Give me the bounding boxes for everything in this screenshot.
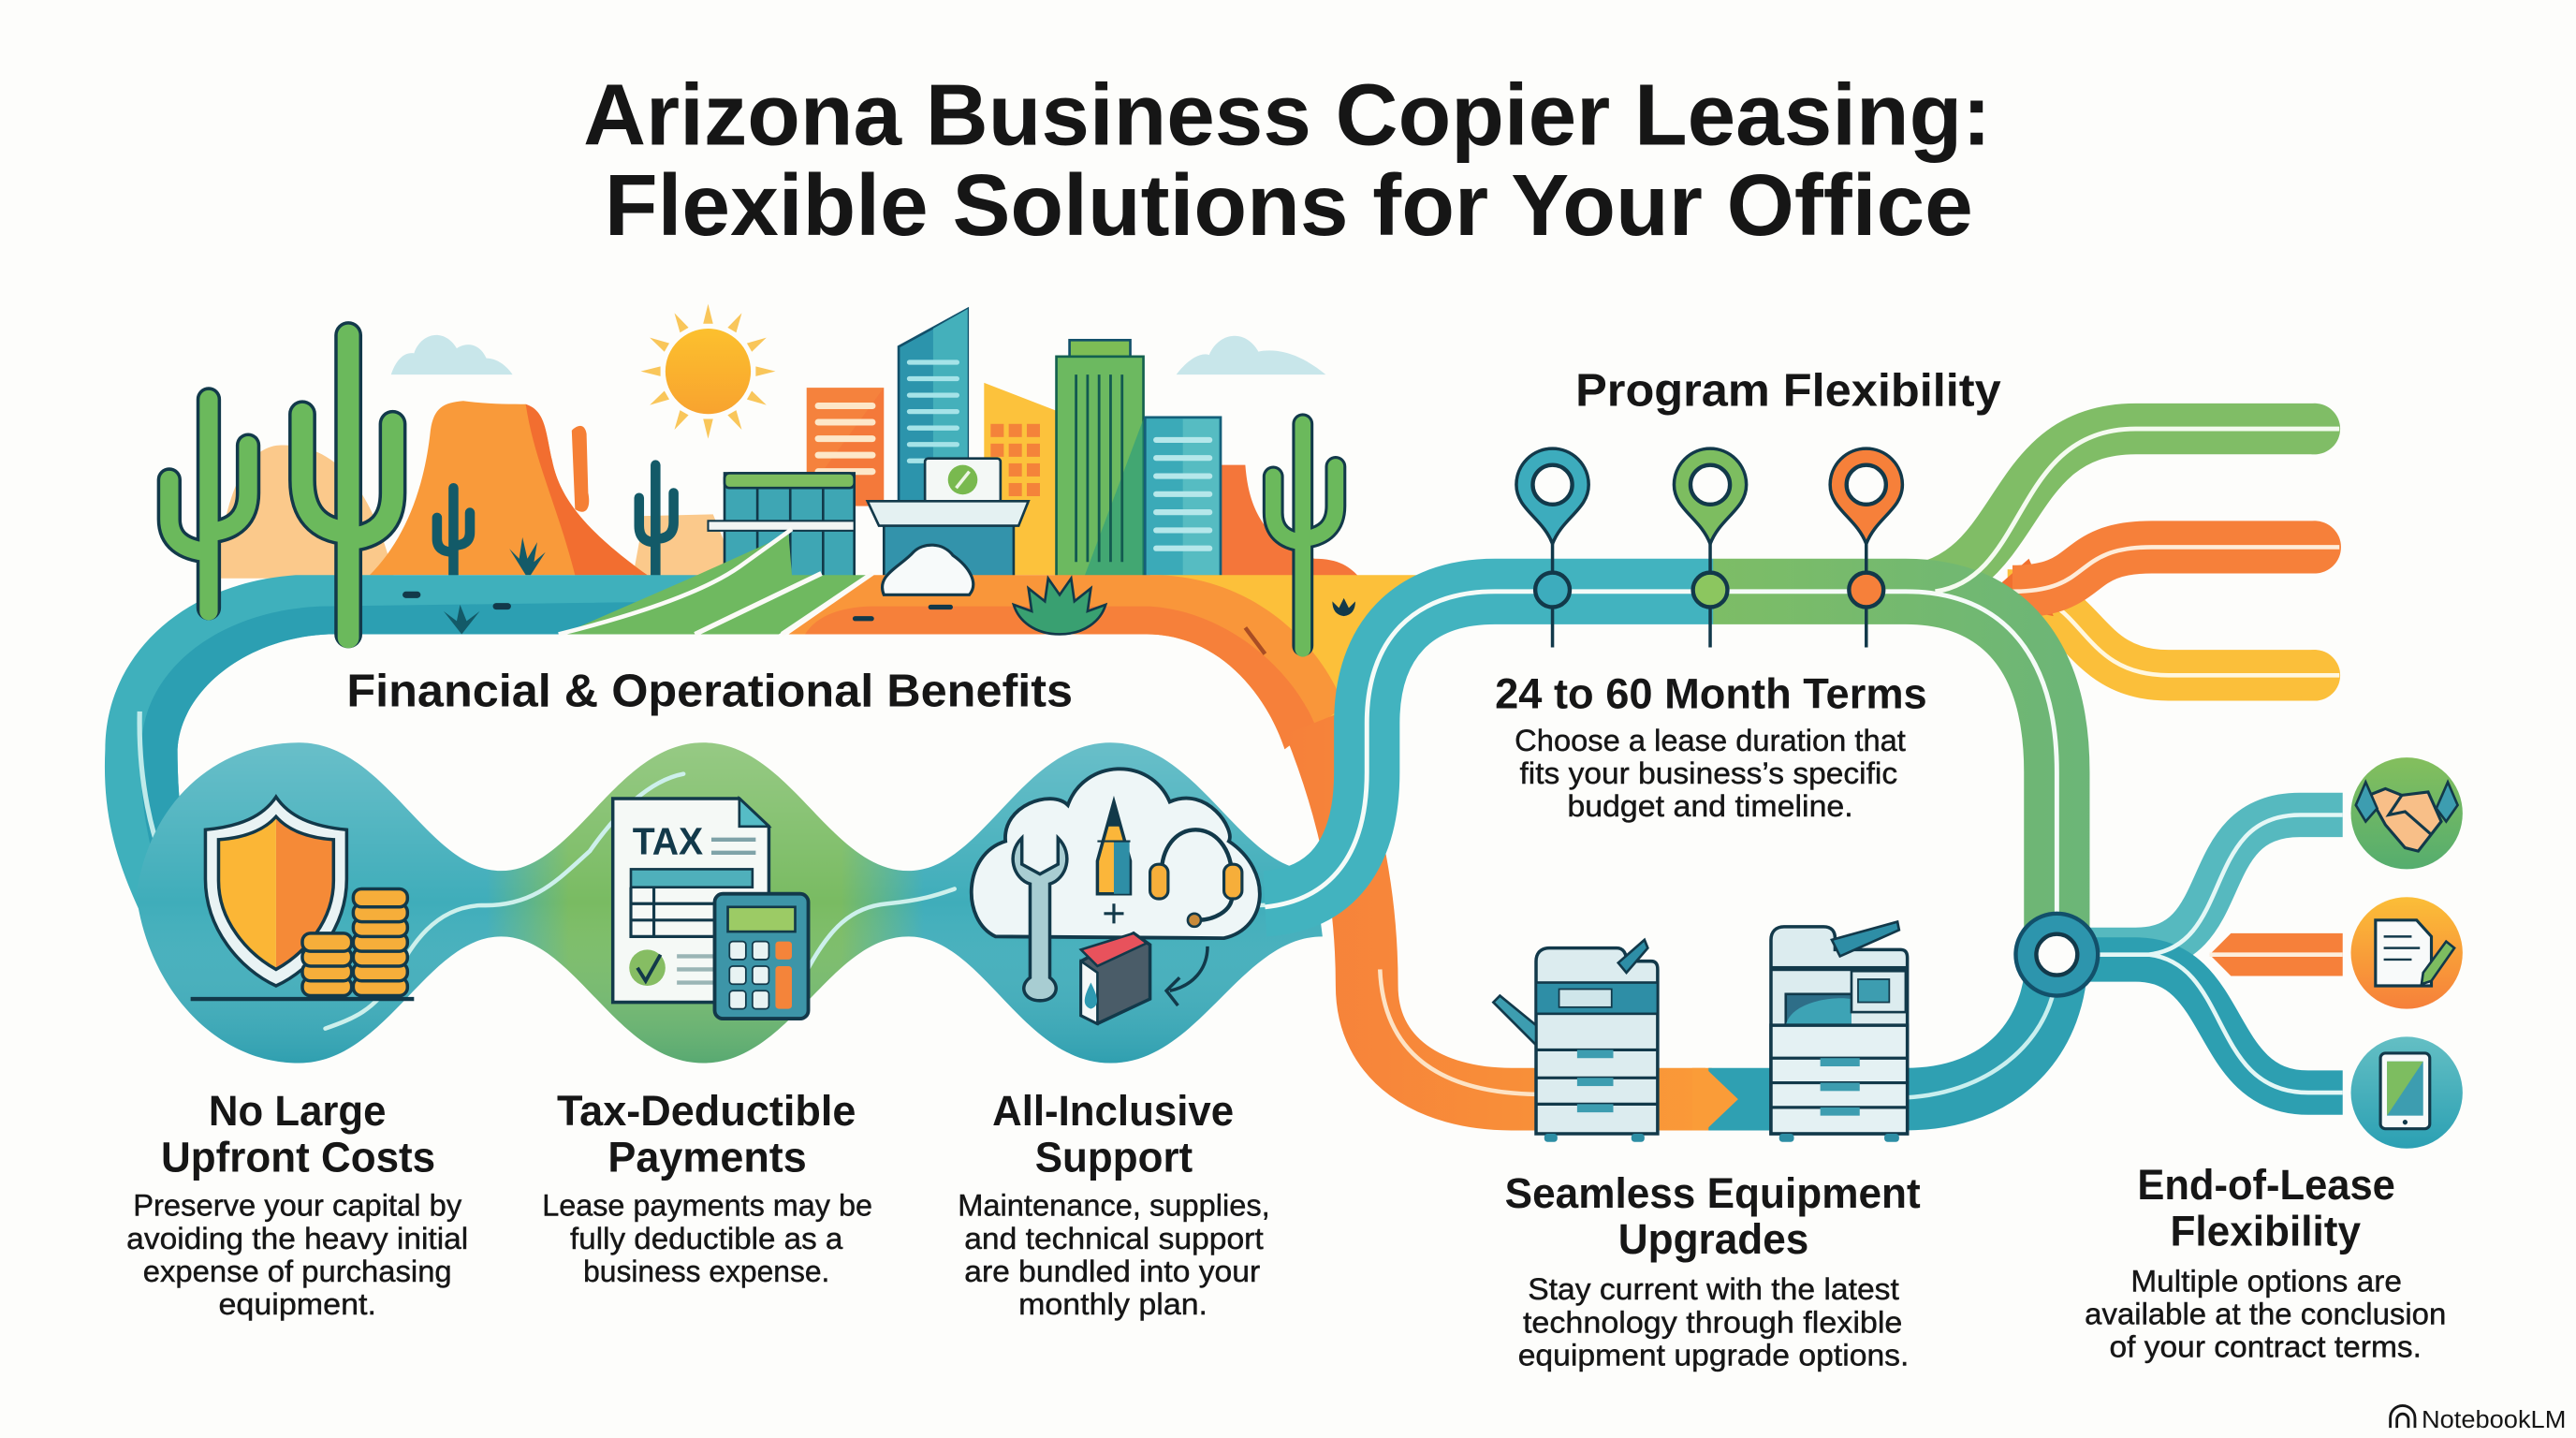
- road: teal left bend: [105, 566, 731, 945]
- text block: all-inclusive support: are bundled into your: [964, 1255, 1260, 1288]
- icon: tax document with calculator: [613, 799, 809, 1019]
- branch white lines: [2078, 814, 2343, 1093]
- text block: seamless equipment upgrades: equipment upgrade options.: [1518, 1338, 1909, 1372]
- white cloud marker on road: [883, 545, 973, 594]
- icon: newer copier: [1771, 922, 1908, 1142]
- text block: 24 to 60 month terms: fits your business’s specific: [1519, 756, 1897, 790]
- title: Arizona Business Copier Leasing:: [583, 66, 1991, 163]
- yellow building: [984, 383, 1057, 575]
- branch: yellow: [2008, 592, 2340, 701]
- branch: orange flat: [2210, 933, 2343, 976]
- benefits wave with three circles: [137, 742, 1323, 1064]
- text block: 24 to 60 month terms: budget and timeline.: [1567, 789, 1853, 823]
- cactus: right: [1273, 424, 1336, 649]
- pin: teal: [1516, 448, 1588, 647]
- text block: tax-deductible payments: fully deductible as a: [570, 1222, 843, 1255]
- small dark cacti and agave: [437, 465, 674, 575]
- pin: orange: [1830, 448, 1902, 647]
- orange building: [807, 388, 884, 506]
- icon: older copier: [1493, 940, 1658, 1142]
- text block: end-of-lease flexibility: Flexibility: [2170, 1207, 2362, 1255]
- icon: left cloud: [391, 335, 513, 374]
- illustration: Arizona landscape and city skyline: [217, 304, 1360, 579]
- logo: NotebookLM: NotebookLM: [2422, 1405, 2566, 1433]
- text block: seamless equipment upgrades: technology through flexible: [1523, 1305, 1902, 1339]
- ground: yellow sand strip: [1150, 575, 1416, 723]
- plus sign: [1104, 903, 1123, 923]
- icon: shield with coins: [191, 797, 414, 999]
- end-of-lease branches: [2078, 814, 2343, 1093]
- text block: seamless equipment upgrades: Stay current with the latest: [1528, 1272, 1899, 1306]
- pencil: [1097, 801, 1131, 894]
- icon: right cloud: [1177, 336, 1325, 374]
- text block: no large upfront costs: equipment.: [218, 1287, 376, 1321]
- text block: end-of-lease flexibility: [2085, 1161, 2446, 1364]
- teal right building: [1145, 418, 1221, 577]
- cacti in front of road: [169, 335, 1355, 654]
- green tower: [1057, 340, 1144, 577]
- icon: sun: [641, 304, 775, 439]
- text block: 24 to 60 month terms: Choose a lease duration that: [1515, 724, 1906, 757]
- text block: all-inclusive support: monthly plan.: [1018, 1287, 1208, 1321]
- mesa: [370, 401, 648, 575]
- pin: green: [1674, 448, 1747, 647]
- headset: [1150, 829, 1242, 927]
- text block: tax-deductible payments: [542, 1087, 872, 1288]
- sand hills: [217, 446, 739, 579]
- title: Flexible Solutions for Your Office: [605, 156, 1973, 254]
- kiosk with sign: [868, 459, 1029, 577]
- title: [583, 66, 1991, 254]
- text block: no large upfront costs: expense of purchasing: [143, 1255, 452, 1288]
- ring connector: [2015, 914, 2098, 996]
- icon: handshake: [2351, 757, 2463, 869]
- icon: support cloud with wrench, pencil, headset, ink: [972, 769, 1260, 1023]
- ink cartridge: [1081, 933, 1150, 1023]
- text block: all-inclusive support: [958, 1087, 1270, 1321]
- calculator: [714, 894, 809, 1019]
- text block: no large upfront costs: Preserve your capital by: [133, 1189, 462, 1223]
- refill arrow: [1166, 946, 1208, 1005]
- cactus: left: [169, 399, 248, 611]
- wrench: [1013, 838, 1067, 1001]
- heading: financial and operational benefits: Financial & Operational Benefits: [346, 667, 1073, 717]
- branch: teal upper: [2078, 814, 2343, 949]
- text block: 24 to 60 month terms: 24 to 60 Month Terms: [1495, 669, 1927, 717]
- branch: green: [1889, 404, 2340, 592]
- road: orange upper ground and descending road: [788, 575, 1738, 1130]
- text block: end-of-lease flexibility: available at the conclusion: [2085, 1298, 2446, 1331]
- text block: tax-deductible payments: Payments: [607, 1133, 807, 1181]
- icon: contract and pen: [2351, 897, 2463, 1009]
- text block: all-inclusive support: Support: [1035, 1133, 1193, 1181]
- cactus: tall: [302, 335, 393, 638]
- text block: tax-deductible payments: business expense.: [583, 1255, 829, 1288]
- text block: seamless equipment upgrades: Seamless Equipment: [1505, 1169, 1921, 1217]
- text block: tax-deductible payments: Tax-Deductible: [557, 1087, 856, 1135]
- text block: no large upfront costs: Upfront Costs: [161, 1133, 435, 1181]
- text block: end-of-lease flexibility: End-of-Lease: [2137, 1161, 2395, 1209]
- text block: seamless equipment upgrades: [1505, 1169, 1921, 1372]
- text block: no large upfront costs: No Large: [209, 1087, 386, 1135]
- road: three right-hand branches: [1889, 404, 2341, 701]
- heading: program flexibility: Program Flexibility: [1575, 365, 2001, 416]
- road: teal lower section to ring: [1692, 955, 2056, 1130]
- text block: all-inclusive support: Maintenance, supplies,: [958, 1189, 1270, 1223]
- text block: all-inclusive support: and technical support: [964, 1222, 1264, 1255]
- branch: teal lower: [2078, 960, 2343, 1093]
- text block: end-of-lease flexibility: of your contract terms.: [2110, 1330, 2422, 1364]
- text block: no large upfront costs: [126, 1087, 468, 1321]
- text block: all-inclusive support: All-Inclusive: [992, 1087, 1234, 1135]
- road: green lanes in ground: [559, 529, 872, 634]
- orange ridge behind towers: [1221, 465, 1360, 579]
- main road: program flexibility loop: [1265, 429, 2339, 929]
- icon: tablet: [2351, 1036, 2463, 1149]
- low glass building: [708, 473, 855, 577]
- coin stacks: [302, 888, 407, 996]
- text block: end-of-lease flexibility: Multiple options are: [2130, 1264, 2402, 1298]
- text block: 24 to 60 month terms: [1495, 669, 1927, 823]
- teal tower: [899, 309, 968, 503]
- text block: tax-deductible payments: Lease payments may be: [542, 1189, 872, 1223]
- icon: tax document with calculator: TAX: [633, 820, 703, 863]
- branch: orange: [2001, 521, 2341, 616]
- text block: seamless equipment upgrades: Upgrades: [1618, 1215, 1808, 1263]
- agave plant: [1014, 579, 1105, 634]
- text block: no large upfront costs: avoiding the heavy initial: [126, 1222, 468, 1255]
- markers: three term pins: [1516, 448, 1902, 647]
